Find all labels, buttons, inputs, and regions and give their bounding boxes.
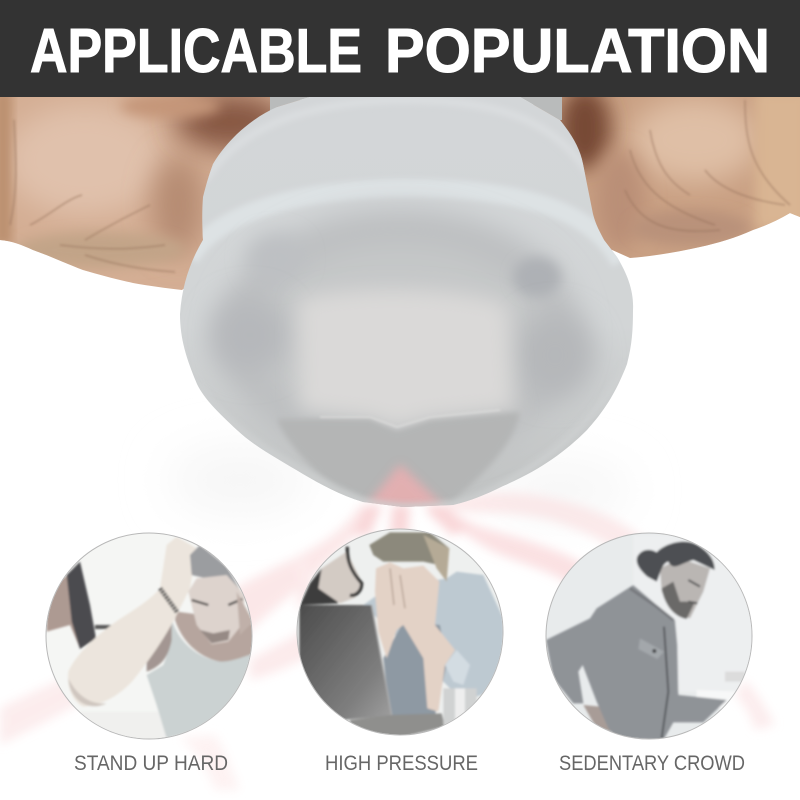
silicone sleeve xyxy=(170,97,640,512)
tank top region xyxy=(147,618,253,738)
circle photo: sedentary crowd xyxy=(546,533,753,740)
grey stem behind sleeve xyxy=(270,97,562,120)
photo: hands holding the sleeve xyxy=(0,86,800,512)
inner shadow ring xyxy=(235,225,565,445)
label: stand up hard: STAND UP HARD xyxy=(74,752,228,775)
circle photo: stand up hard xyxy=(46,533,253,745)
pink pressure point xyxy=(369,463,442,507)
title: APPLICABLE xyxy=(30,17,362,86)
hands and forearms xyxy=(375,562,455,712)
lower fold xyxy=(277,412,520,510)
table xyxy=(350,713,445,738)
title banner xyxy=(0,0,800,97)
skin at back xyxy=(583,705,612,732)
shirt xyxy=(363,572,503,702)
hair xyxy=(369,532,449,567)
circle photo: high pressure xyxy=(297,529,503,738)
central light block xyxy=(298,289,520,427)
label: sedentary crowd: SEDENTARY CROWD xyxy=(559,752,745,775)
title: POPULATION xyxy=(385,17,770,86)
hair and face xyxy=(189,546,240,588)
rim highlight xyxy=(190,188,620,262)
left hand xyxy=(0,90,300,297)
arm xyxy=(68,537,197,707)
title xyxy=(30,17,770,86)
shirt xyxy=(546,585,727,740)
laptop xyxy=(299,605,392,722)
photo: haze behind sleeve xyxy=(170,450,630,515)
red pressure ribbons xyxy=(0,492,775,790)
label: high pressure: HIGH PRESSURE xyxy=(325,752,478,775)
right hand xyxy=(533,97,800,258)
head xyxy=(660,558,710,618)
lower edge xyxy=(309,474,514,507)
